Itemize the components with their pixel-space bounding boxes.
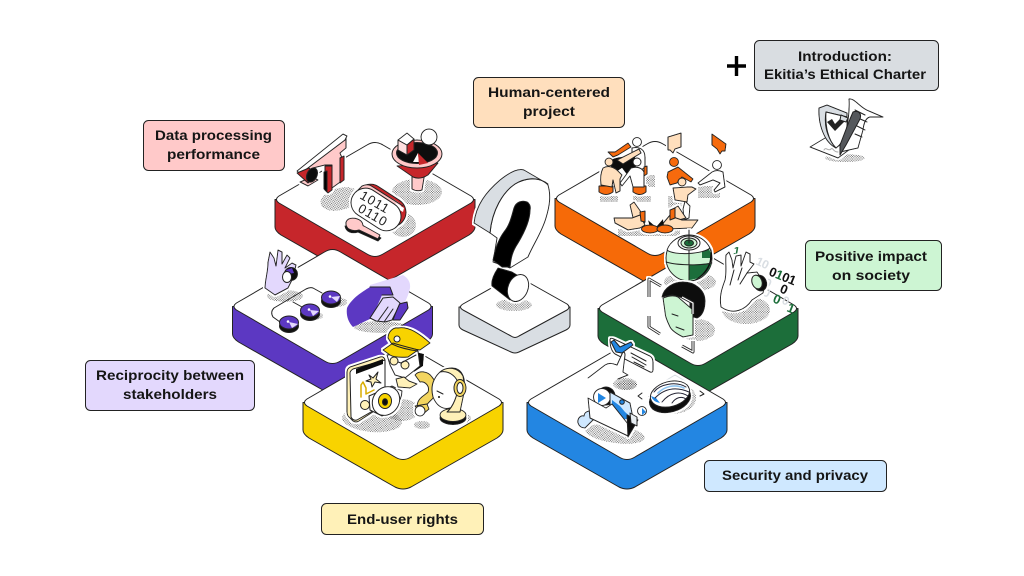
label: Introduction: Ekitia's Ethical Charter: Introduction: bbox=[798, 48, 892, 64]
icon: question mark bbox=[474, 169, 550, 311]
icon: discussion group bbox=[599, 133, 726, 236]
icon: hand holding coin with binary: 0 bbox=[761, 285, 773, 301]
label: End-user rights: End-user rights bbox=[347, 511, 458, 527]
label: Reciprocity between stakeholders: stakeholders bbox=[123, 386, 217, 402]
icon: handshake bbox=[347, 275, 410, 333]
icon: hand holding chip bbox=[265, 250, 303, 302]
icon: eye on map card bbox=[341, 357, 419, 435]
icon: hand holding coin with binary: 1 bbox=[732, 245, 741, 258]
platform: orange bbox=[555, 142, 755, 285]
plus sign bbox=[727, 56, 746, 76]
label: Human-centered project: Human-centered bbox=[488, 84, 610, 100]
platform: green bbox=[598, 252, 798, 395]
icon: org tree with discs bbox=[272, 288, 347, 332]
icon: face recognition frame bbox=[649, 279, 715, 352]
icon: hand holding coin with binary: 100 bbox=[751, 270, 774, 291]
platform: grey question mark base bbox=[459, 276, 570, 353]
label: Data processing performance bbox=[144, 120, 284, 170]
icon: funnel bbox=[392, 129, 442, 205]
icon: hand holding coin with binary: 1 bbox=[785, 300, 797, 316]
icon: hand holding coin with binary: 0 bbox=[780, 293, 792, 309]
platform: yellow bbox=[303, 346, 503, 489]
platform: red bbox=[275, 142, 475, 286]
icon: folder with video and cloud bbox=[578, 378, 646, 447]
platform: blue bbox=[527, 346, 727, 489]
icon: hand holding coin with binary bbox=[720, 245, 798, 324]
label: Reciprocity between stakeholders: Reciprocity between bbox=[96, 367, 244, 383]
icon: hand holding coin with binary: 0 bbox=[771, 291, 783, 307]
icon: binary pill and key bbox=[345, 179, 416, 241]
icon: hand holding coin with binary: 10 bbox=[754, 254, 772, 272]
label: Positive impact on society bbox=[806, 240, 942, 290]
label: Security and privacy bbox=[704, 460, 886, 492]
label: Human-centered project bbox=[474, 78, 624, 128]
label: Introduction: Ekitia's Ethical Charter: Ekitia’s Ethical Charter bbox=[764, 66, 927, 82]
label: Security and privacy: Security and privacy bbox=[722, 467, 868, 483]
label: Data processing performance: performance bbox=[167, 146, 260, 162]
label: Human-centered project: project bbox=[523, 103, 575, 119]
icon: check card and pointing hand bbox=[588, 338, 653, 390]
icon: binary pill and key: 0110 bbox=[356, 201, 391, 230]
icon: hand holding coin with binary: 0101 bbox=[767, 264, 798, 288]
label: End-user rights bbox=[322, 504, 484, 534]
icon: fingerprint bbox=[638, 375, 704, 417]
label: Introduction: Ekitia's Ethical Charter bbox=[754, 40, 938, 90]
label: Positive impact on society: Positive impact bbox=[815, 248, 927, 264]
label: Positive impact on society: on society bbox=[832, 267, 910, 283]
icon: officer with cap bbox=[383, 328, 430, 388]
platform: purple bbox=[232, 250, 432, 393]
label: Reciprocity between stakeholders bbox=[86, 360, 254, 410]
icon: globe target bbox=[664, 230, 716, 292]
icon: bust with question mark and headphones bbox=[413, 368, 471, 429]
icon: robot arm bbox=[297, 134, 362, 215]
label: Data processing performance: Data processing bbox=[155, 127, 272, 143]
icon: binary pill and key: 1011 bbox=[358, 188, 393, 217]
icon: hand holding coin with binary: 0 bbox=[778, 281, 790, 297]
icon: charter document bbox=[810, 99, 883, 162]
